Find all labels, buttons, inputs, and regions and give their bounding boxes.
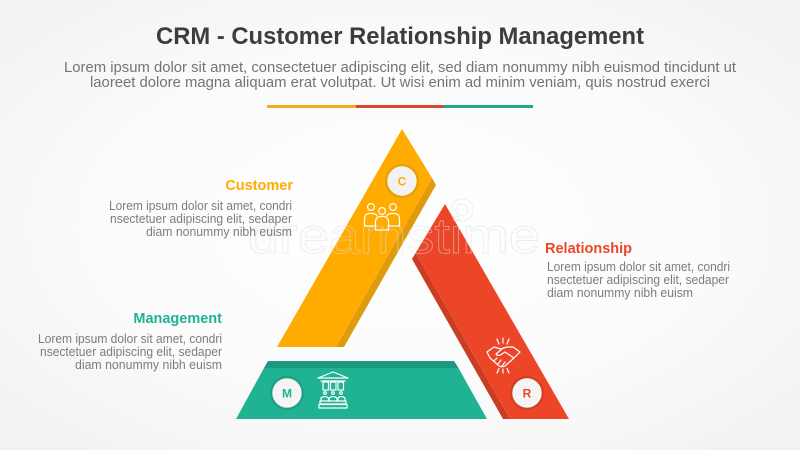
text block: customer: diam nonummy nibh euism — [146, 224, 292, 239]
subtitle text — [64, 60, 736, 91]
text block: relationship — [545, 241, 730, 300]
badge: M — [270, 376, 304, 410]
icon: people — [364, 204, 400, 230]
badge: C: C — [398, 174, 407, 188]
badge: C — [385, 164, 419, 198]
title: CRM - Customer Relationship Management — [156, 23, 644, 50]
text block: customer — [109, 178, 293, 239]
text block: relationship: Lorem ipsum dolor sit amet, condri — [547, 259, 730, 274]
panel: customer segment — [277, 129, 436, 347]
badge: R: R — [523, 386, 532, 400]
text block: relationship: Relationship — [545, 241, 632, 257]
tricolour divider bar — [267, 105, 533, 108]
badge: M: M — [282, 386, 292, 400]
icon: handshake — [487, 338, 520, 373]
text block: customer: Customer — [225, 178, 293, 194]
text block: management: Management — [133, 311, 222, 327]
text block: management: Lorem ipsum dolor sit amet, condri — [38, 331, 222, 346]
badge: R — [510, 376, 544, 410]
text block: management: diam nonummy nibh euism — [75, 357, 222, 372]
subtitle text: Lorem ipsum dolor sit amet, consectetuer adipiscing elit, sed diam nonummy nibh euismod tincidunt ut — [64, 60, 736, 76]
panel: management segment — [236, 361, 487, 419]
text block: relationship: nsectetuer adipiscing elit, sedaper — [547, 272, 730, 287]
text block: management — [38, 311, 223, 372]
watermark: dreamstime — [248, 208, 540, 264]
text block: customer: nsectetuer adipiscing elit, sedaper — [110, 211, 293, 226]
text block: relationship: diam nonummy nibh euism — [547, 285, 693, 300]
text block: customer: Lorem ipsum dolor sit amet, condri — [109, 198, 292, 213]
icon: building with people — [318, 372, 348, 408]
panel: relationship segment — [412, 204, 569, 419]
text block: management: nsectetuer adipiscing elit, sedaper — [40, 344, 223, 359]
subtitle text: laoreet dolore magna aliquam erat volutpat. Ut wisi enim ad minim veniam, quis nostrud exerci — [90, 75, 710, 91]
